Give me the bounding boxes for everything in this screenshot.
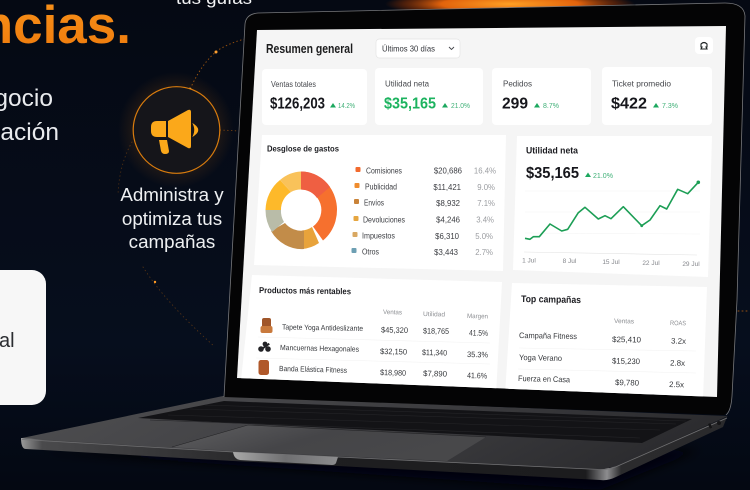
row: fuerza en casa: 2.5x bbox=[669, 380, 684, 389]
table header: ROAS bbox=[670, 320, 687, 327]
panel: top campañas bbox=[505, 283, 707, 400]
row: yoga verano: $15,230 bbox=[612, 357, 641, 366]
legend table: Otros bbox=[362, 248, 379, 256]
row: mancuernas bbox=[258, 342, 488, 358]
row: campaña fitness: $25,410 bbox=[612, 335, 642, 345]
panel heading: Utilidad neta bbox=[526, 146, 579, 156]
legend table: $11,421 bbox=[433, 183, 461, 192]
legend table: 16.4% bbox=[474, 166, 496, 176]
row: mancuernas: Mancuernas Hexagonales bbox=[280, 343, 359, 354]
caption: Administra y optimiza tus campañas: optimiza tus bbox=[122, 208, 222, 229]
KPI: utilidad neta: $35,165 bbox=[384, 96, 436, 112]
icon: top right button bbox=[695, 37, 713, 54]
table header: Utilidad bbox=[423, 311, 445, 318]
laptop base bbox=[21, 396, 728, 480]
side ports bbox=[708, 421, 721, 429]
laptop shadow bbox=[40, 450, 700, 490]
panel: utilidad neta chart: 21.0% bbox=[593, 171, 613, 180]
panel: desglose de gastos bbox=[254, 135, 506, 271]
row: campaña fitness bbox=[519, 332, 686, 344]
KPI: pedidos: Pedidos bbox=[503, 80, 532, 88]
legend table: $8,932 bbox=[436, 199, 460, 208]
row: tapete yoga: 41.5% bbox=[469, 329, 488, 338]
KPI: ticket promedio: Ticket promedio bbox=[612, 80, 672, 88]
KPI: pedidos bbox=[492, 68, 591, 125]
legend table: $4,246 bbox=[436, 216, 460, 224]
KPI: ticket promedio: 7.3% bbox=[662, 101, 678, 110]
icon: dumbbells bbox=[258, 342, 271, 352]
date dropdown bbox=[376, 39, 460, 58]
white callout card fragment bbox=[0, 270, 46, 405]
laptop front edge bbox=[21, 417, 727, 480]
row: fuerza en casa: $9,780 bbox=[615, 378, 640, 388]
row: banda elástica: $18,980 bbox=[380, 368, 407, 378]
KPI: utilidad neta: 21.0% bbox=[451, 101, 470, 110]
panel: utilidad neta chart bbox=[513, 136, 712, 277]
caption: Administra y optimiza tus campañas: campañas bbox=[129, 231, 215, 252]
icon: yoga mat bbox=[260, 318, 272, 333]
date dropdown: Últimos 30 días bbox=[382, 44, 435, 54]
legend table: Envíos bbox=[364, 198, 384, 208]
big value: $35,165 bbox=[526, 165, 579, 182]
row: banda elástica: $7,890 bbox=[423, 369, 448, 379]
icon: elastic band bbox=[258, 360, 269, 375]
row: yoga verano: Yoga Verano bbox=[519, 353, 563, 363]
row: campaña fitness: 3.2x bbox=[671, 337, 686, 346]
dashboard header bbox=[266, 37, 713, 58]
caption: Administra y optimiza tus campañas bbox=[120, 184, 224, 252]
KPI: ticket promedio bbox=[602, 67, 712, 125]
row: fuerza en casa: Fuerza en Casa bbox=[518, 374, 571, 384]
KPI: ventas totales bbox=[262, 69, 367, 125]
panel heading: Top campañas bbox=[521, 294, 581, 306]
caption: Administra y optimiza tus campañas: Administra y bbox=[120, 184, 224, 205]
table header bbox=[383, 309, 488, 320]
table header: Margen bbox=[467, 313, 488, 320]
table header bbox=[614, 318, 686, 326]
legend table: Devoluciones bbox=[363, 216, 405, 224]
keyboard well bbox=[138, 401, 692, 443]
dashboard header: Resumen general bbox=[266, 42, 353, 56]
legend table: 5.0% bbox=[475, 232, 493, 241]
KPI: ventas totales: Ventas totales bbox=[271, 80, 316, 89]
legend table: Publicidad bbox=[365, 182, 397, 192]
row: tapete yoga bbox=[260, 318, 488, 338]
KPI: pedidos: 299 bbox=[502, 96, 528, 112]
body copy fragment: ación bbox=[0, 119, 59, 146]
line chart: 1 Jul bbox=[522, 258, 536, 264]
line chart bbox=[522, 180, 700, 268]
row separators bbox=[518, 348, 696, 373]
body copy fragment bbox=[0, 85, 59, 146]
row: fuerza en casa bbox=[518, 376, 684, 388]
donut chart bbox=[266, 171, 337, 249]
panel: productos más rentables bbox=[240, 275, 502, 395]
legend table: 2.7% bbox=[475, 248, 493, 257]
row: mancuernas: $32,150 bbox=[380, 347, 408, 357]
row: campaña fitness: Campaña Fitness bbox=[519, 331, 577, 341]
row: banda elástica: Banda Elástica Fitness bbox=[279, 364, 347, 375]
legend table: $6,310 bbox=[435, 232, 460, 241]
row: yoga verano: 2.8x bbox=[670, 359, 685, 368]
row: tapete yoga: $18,765 bbox=[423, 327, 450, 336]
KPI: ventas totales: $126,203 bbox=[270, 96, 325, 112]
row: banda elástica: 41.6% bbox=[467, 371, 487, 381]
row: tapete yoga: $45,320 bbox=[381, 326, 409, 335]
legend table: 3.4% bbox=[476, 216, 494, 224]
laptop deck bbox=[22, 396, 728, 470]
legend table: $20,686 bbox=[434, 166, 462, 176]
KPI: pedidos: 8.7% bbox=[543, 101, 559, 110]
trend bbox=[585, 172, 591, 177]
silver front highlight bbox=[22, 418, 727, 470]
dashboard screen bbox=[237, 26, 726, 400]
trackpad bbox=[172, 425, 486, 461]
KPI: utilidad neta bbox=[375, 68, 483, 125]
KPI: ticket promedio: $422 bbox=[611, 96, 647, 112]
panel heading: Desglose de gastos bbox=[267, 144, 339, 154]
KPI: ventas totales: 14.2% bbox=[338, 101, 355, 110]
line chart: 15 Jul bbox=[602, 259, 620, 266]
top orange glow bbox=[385, 0, 635, 18]
panel heading: Productos más rentables bbox=[259, 285, 351, 296]
legend table: Impuestos bbox=[362, 232, 395, 240]
keyboard key rows bbox=[150, 405, 686, 438]
legend table: Comisiones bbox=[366, 166, 402, 176]
row: yoga verano bbox=[519, 354, 685, 366]
legend table: $3,443 bbox=[434, 248, 458, 257]
line chart: 29 Jul bbox=[682, 261, 700, 268]
table header: Ventas bbox=[614, 318, 635, 325]
line chart: 8 Jul bbox=[563, 258, 577, 265]
row: banda elástica bbox=[258, 360, 487, 381]
legend table bbox=[352, 166, 496, 257]
legend table: 9.0% bbox=[477, 183, 495, 192]
dotted orbit arcs bbox=[118, 39, 750, 347]
legend table: 7.1% bbox=[477, 199, 495, 208]
row separators bbox=[256, 337, 490, 364]
line chart: 22 Jul bbox=[642, 260, 660, 267]
icon: megaphone in glowing ring bbox=[118, 72, 234, 188]
table header: Ventas bbox=[383, 309, 403, 316]
lid notch bbox=[233, 452, 338, 465]
KPI: utilidad neta: Utilidad neta bbox=[385, 80, 430, 88]
row: mancuernas: $11,340 bbox=[422, 348, 448, 358]
laptop lid bbox=[224, 3, 745, 415]
row: tapete yoga: Tapete Yoga Antideslizante bbox=[282, 323, 363, 333]
row: mancuernas: 35.3% bbox=[467, 350, 488, 359]
